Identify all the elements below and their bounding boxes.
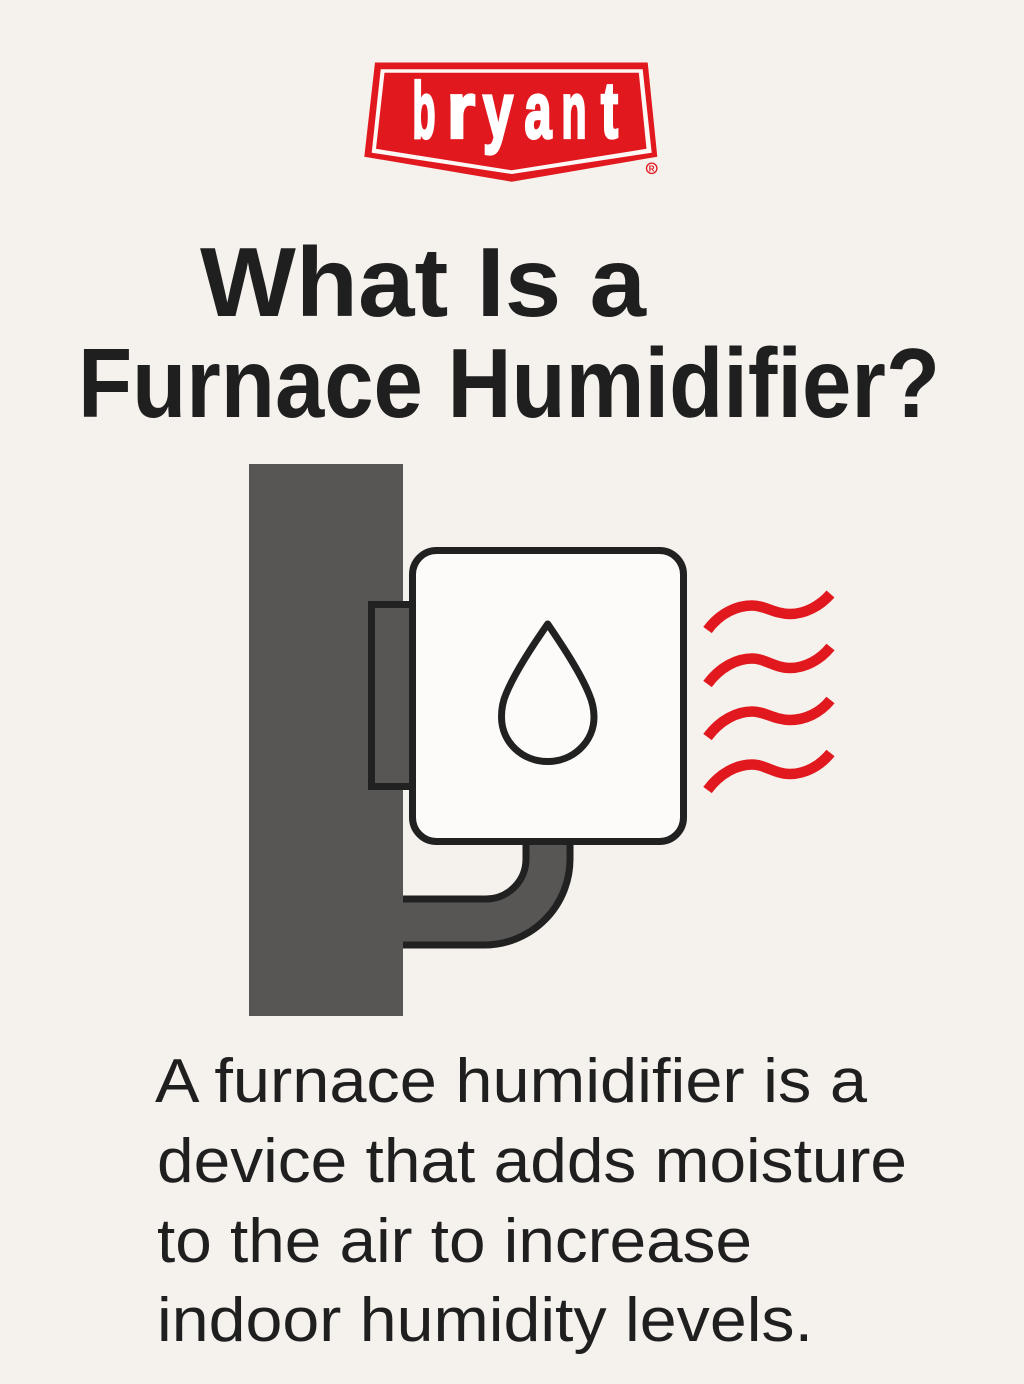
logo: Bryant: t: [601, 66, 618, 154]
title: Furnace Humidifier?: [78, 328, 940, 438]
icon: red air waves: [708, 594, 830, 790]
logo: Bryant: R: [649, 164, 655, 173]
logo: Bryant: r: [447, 66, 475, 154]
logo: Bryant: b: [412, 66, 436, 154]
description text: A furnace humidifier is a: [155, 1047, 868, 1116]
mounting bracket: [372, 604, 414, 786]
description text: [155, 1047, 907, 1355]
humidifier box: [412, 550, 684, 842]
icon: water drop: [502, 624, 594, 762]
pipe connecting humidifier to furnace: [403, 840, 570, 945]
logo: Bryant: a: [524, 66, 552, 154]
logo: Bryant: y: [483, 66, 513, 154]
description text: device that adds moisture: [157, 1127, 907, 1196]
furnace wall: [249, 464, 403, 1016]
logo: Bryant: [364, 62, 657, 182]
description text: indoor humidity levels.: [157, 1286, 813, 1355]
title: [78, 227, 940, 438]
title: What Is a: [200, 227, 648, 337]
description text: to the air to increase: [157, 1207, 752, 1276]
logo: Bryant: n: [562, 66, 586, 154]
